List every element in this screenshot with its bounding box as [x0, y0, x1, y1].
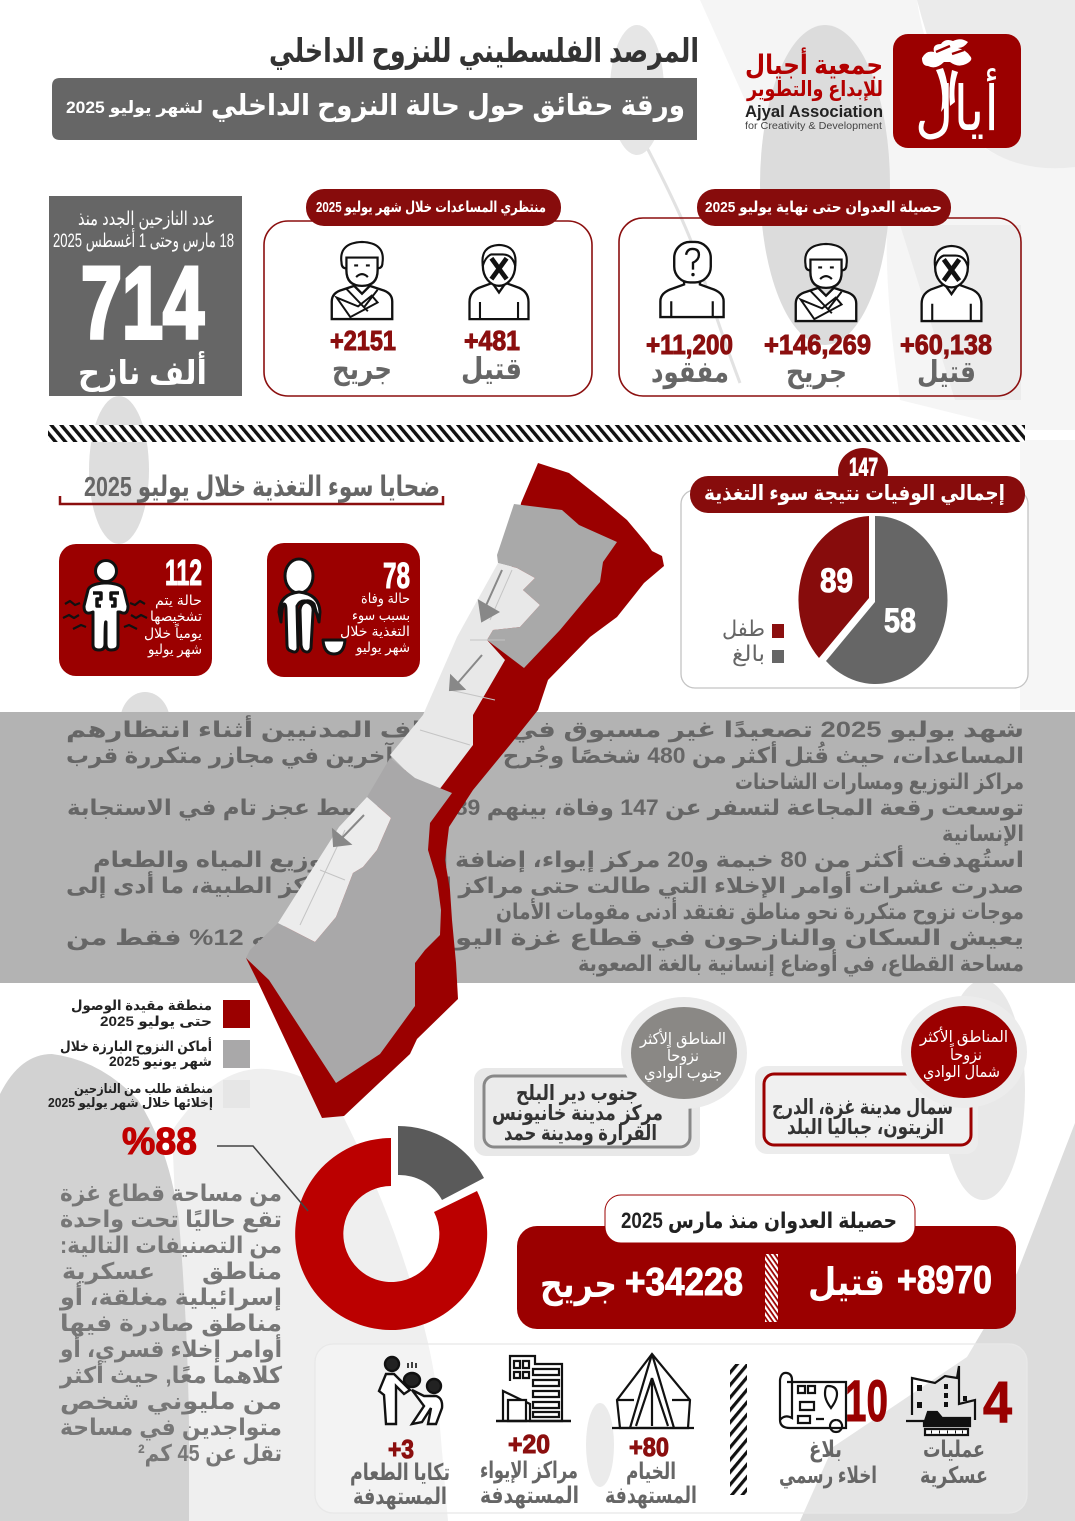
stat: injured	[330, 325, 396, 386]
stat: missing: +11,200	[646, 329, 733, 360]
heading tab	[605, 1195, 915, 1243]
evacuation order strip south	[278, 797, 391, 942]
evacuation order strip north	[390, 563, 540, 793]
grey narrative band: استُهدفت أكثر من 80 خيمة و20 مركز إيواء، إضافة إلى نقاط توزيع المياه والطعام	[93, 844, 1024, 873]
panel: aggression toll to end of July	[619, 189, 1021, 396]
stat: military operations	[906, 1366, 1012, 1489]
heading pill: حصيلة العدوان حتى نهاية يوليو 2025	[705, 199, 942, 216]
heading pill: إجمالي الوفيات نتيجة سوء التغذية	[704, 482, 1005, 505]
restricted red zone	[246, 463, 664, 1118]
stat: killed since March: قتيل	[808, 1262, 885, 1304]
stat: military operations: عسكرية	[920, 1462, 988, 1489]
panel: total malnutrition deaths	[681, 448, 1028, 688]
stat: tents	[605, 1354, 697, 1509]
text: share of Gaza area: مناطق	[202, 1258, 282, 1285]
icon: killed person	[470, 245, 528, 319]
text: share of Gaza area	[59, 1180, 283, 1467]
map legend: شهر يونيو 2025	[109, 1053, 212, 1070]
stat: injured: جريح	[332, 353, 392, 386]
callout: south of the valley	[474, 997, 747, 1156]
logo wordmark	[745, 47, 883, 132]
text: share of Gaza area: من التصنيفات التالية:	[60, 1232, 282, 1259]
map: Gaza strip displacement zones	[246, 463, 664, 1118]
card: daily malnutrition diagnoses: 112	[165, 552, 202, 593]
malnutrition heading: ضحايا سوء التغذية خلال يوليو 2025	[84, 471, 440, 503]
logo wordmark: for Creativity & Development	[745, 120, 882, 132]
panel: new displaced count: 18 مارس وحتى 1 أغسطس 2025	[53, 228, 234, 252]
text: share of Gaza area: مناطق صادرة فيها	[60, 1310, 282, 1337]
heading pill	[306, 189, 561, 226]
legend	[722, 616, 784, 666]
icon: sitting person with bowl	[279, 559, 345, 654]
icon: tent	[612, 1354, 694, 1428]
logo wordmark: جمعية أجيال	[745, 47, 883, 80]
map legend: إخلائها خلال شهر يوليو 2025	[48, 1095, 213, 1110]
card: malnutrition deaths: 78	[383, 555, 410, 596]
card: daily malnutrition diagnoses	[59, 544, 212, 676]
text: share of Gaza area: من مليوني شخص	[60, 1388, 282, 1415]
stat: killed: قتيل	[917, 356, 976, 389]
stat: injured: +2151	[330, 325, 396, 356]
subtitle bar	[52, 78, 697, 140]
icon: map plan	[780, 1373, 846, 1432]
stat: shelter centres: المستهدفة	[480, 1482, 579, 1509]
logo wordmark: Ajyal Association	[745, 102, 883, 121]
stat: evacuation orders: 10	[845, 1369, 888, 1434]
stat: tents: الخيام	[626, 1458, 676, 1485]
pie chart: 89	[820, 562, 853, 600]
logo: Ajyal tile: أيال	[915, 68, 999, 144]
icon: injured person	[332, 242, 392, 319]
callout: north of the valley: الزيتون، جباليا البلد	[787, 1116, 944, 1139]
callout: north of the valley: شمال مدينة غزة، الدرج	[772, 1096, 953, 1120]
leader line	[217, 1146, 308, 1211]
stat: food kitchens	[350, 1357, 450, 1510]
icon: food handout	[379, 1357, 442, 1424]
map legend: أماكن النزوح البارزة خلال	[60, 1037, 212, 1055]
map legend: منطقة مقيدة الوصول	[71, 997, 212, 1014]
stat: injured since March: +34228	[625, 1261, 743, 1304]
logo wordmark: للإبداع والتطوير	[746, 78, 883, 101]
card: daily malnutrition diagnoses: شهر يوليو	[147, 641, 202, 658]
panel: new displaced count: 714	[81, 246, 204, 360]
text: share of Gaza area: متواجدين في مساحة	[60, 1414, 282, 1441]
donut chart	[295, 1126, 487, 1330]
icon: missing person	[660, 242, 724, 317]
text: share of Gaza area: كلاهما معًا, حيث أكثر	[59, 1359, 283, 1389]
stat: 88 percent: %88	[122, 1121, 197, 1163]
stat: tents: +80	[629, 1432, 669, 1462]
legend: طفل	[722, 616, 765, 641]
title: المرصد الفلسطيني للنزوح الداخلي	[269, 32, 699, 71]
icon: tank and ruins	[906, 1366, 975, 1435]
stat: tents: المستهدفة	[605, 1482, 697, 1509]
stat: military operations: 4	[983, 1370, 1012, 1435]
card: daily malnutrition diagnoses: يومياً خلال	[144, 623, 202, 642]
icon: injured person	[796, 244, 856, 321]
callout: north of the valley: شمال الوادي	[923, 1064, 1000, 1082]
stat: injured: جريح	[786, 356, 847, 389]
south displacement area	[246, 758, 452, 1083]
subtitle bar: ورقة حقائق حول حالة النزوح الداخلي	[211, 90, 685, 122]
callout: north of the valley: المناطق الأكثر	[919, 1026, 1008, 1047]
text: share of Gaza area: عسكرية	[62, 1258, 155, 1285]
heading pill: منتظري المساعدات خلال شهر يوليو 2025	[316, 199, 546, 217]
callout: north of the valley: نزوحاً	[949, 1042, 982, 1065]
icon: building	[496, 1356, 571, 1421]
stat: missing: مفقود	[651, 356, 729, 389]
stat: killed: +481	[464, 325, 520, 356]
grey narrative band: صدرت عشرات أوامر الإخلاء التي طالت حتى مراكز الايواء والمراكز الطبية، ما أدى إلى	[66, 870, 1024, 899]
panel: targeted facilities	[315, 1344, 1027, 1513]
stat: shelter centres	[480, 1356, 579, 1509]
stat: evacuation orders	[779, 1369, 888, 1489]
stat: killed since March	[808, 1259, 992, 1304]
north displacement area	[487, 504, 617, 668]
stat: shelter centres: مراكز الإيواء	[480, 1457, 578, 1484]
map legend: منطقة طلب من النازحين	[74, 1081, 213, 1096]
panel: aid seekers	[264, 189, 592, 396]
stat: killed: قتيل	[461, 353, 522, 386]
card: daily malnutrition diagnoses: حالة يتم	[155, 592, 202, 609]
stat: killed	[461, 325, 522, 386]
map legend	[48, 997, 250, 1110]
logo: Ajyal tile	[893, 34, 1021, 148]
stat: evacuation orders: بلاغ	[809, 1436, 842, 1463]
badge 147: 147	[849, 452, 878, 482]
grey narrative band: توسعت رقعة المجاعة لتسفر عن 147 وفاة، بينهم 89 طفلاً، وسط عجز تام في الاستجابة	[67, 793, 1024, 821]
icon: pained body	[63, 560, 147, 650]
card: malnutrition deaths	[267, 543, 420, 677]
grey narrative band	[0, 712, 1075, 983]
stat: food kitchens: +3	[388, 1434, 414, 1464]
stat: killed: +60,138	[900, 329, 992, 360]
grey narrative band: المساعدات، حيث قُتل أكثر من 480 شخصًا وجُرح نحو 2000 آخرين في مجازر متكررة قرب	[66, 740, 1024, 769]
card: malnutrition deaths: شهر يوليو	[355, 639, 410, 656]
stat: food kitchens: المستهدفة	[353, 1483, 447, 1510]
stat: injured since March	[540, 1261, 743, 1306]
stat: missing	[646, 329, 733, 389]
text: share of Gaza area: تقل عن 45 كم²	[138, 1440, 282, 1467]
callout: south of the valley: جنوب الوادي	[644, 1065, 722, 1083]
grey narrative band: الإنسانية	[942, 821, 1024, 846]
legend: بالغ	[732, 641, 765, 666]
callout: north of the valley	[755, 996, 1027, 1154]
pie chart	[798, 516, 947, 684]
callout: south of the valley: القرارة ومدينة حمد	[504, 1122, 657, 1145]
card: daily malnutrition diagnoses: تشخيصها	[150, 608, 202, 625]
card: malnutrition deaths: التغذية خلال	[340, 623, 410, 639]
stat: killed since March: +8970	[897, 1259, 992, 1302]
panel: new displaced count	[49, 196, 242, 396]
stat: shelter centres: +20	[508, 1429, 550, 1459]
stat: injured	[764, 329, 871, 389]
callout: south of the valley: جنوب دير البلح	[516, 1082, 638, 1105]
panel: toll since March	[517, 1195, 1016, 1329]
grey narrative band: يعيش السكان والنازحون في قطاع غزة اليوم على ما نسبته 12% فقط من	[66, 925, 1024, 951]
panel: new displaced count: ألف نازح	[78, 351, 207, 392]
stat: military operations: عمليات	[923, 1436, 985, 1462]
callout: south of the valley: نزوحاً	[666, 1043, 699, 1066]
stat: killed	[900, 329, 992, 389]
heading pill	[697, 189, 951, 226]
stat: injured: +146,269	[764, 329, 871, 360]
text: share of Gaza area: تقع حاليًا تحت واحدة	[60, 1206, 282, 1233]
card: malnutrition deaths: حالة وفاة	[361, 590, 410, 607]
heading tab: حصيلة العدوان منذ مارس 2025	[621, 1208, 897, 1234]
text: share of Gaza area: من مساحة قطاع غزة	[60, 1180, 282, 1207]
grey narrative band: مساحة القطاع، في أوضاع إنسانية بالغة الصعوبة	[578, 948, 1024, 977]
map legend: حتى يوليو 2025	[100, 1013, 212, 1030]
icon: killed person	[922, 246, 981, 321]
callout: south of the valley: مركز مدينة خانيونس	[492, 1102, 663, 1125]
text: share of Gaza area: أوامر إخلاء قسري، أو	[59, 1333, 282, 1363]
stat: injured since March: جريح	[540, 1264, 617, 1306]
stat: evacuation orders: اخلاء رسمي	[779, 1462, 877, 1489]
pie chart: 58	[884, 602, 916, 640]
panel: new displaced count: عدد النازحين الجدد منذ	[78, 209, 215, 230]
callout: south of the valley: المناطق الأكثر	[639, 1028, 726, 1049]
badge 147	[838, 448, 888, 496]
heading pill	[690, 476, 1025, 513]
subtitle bar: لشهر يوليو 2025	[66, 98, 203, 118]
text: share of Gaza area: إسرائيلية مغلقة، أو	[59, 1281, 282, 1311]
stat: food kitchens: تكايا الطعام	[350, 1459, 450, 1486]
card: malnutrition deaths: بسبب سوء	[352, 607, 410, 624]
grey narrative band: شهد يوليو 2025 تصعيدًا غير مسبوق في استهداف المدنيين أثناء انتظارهم	[66, 714, 1024, 743]
